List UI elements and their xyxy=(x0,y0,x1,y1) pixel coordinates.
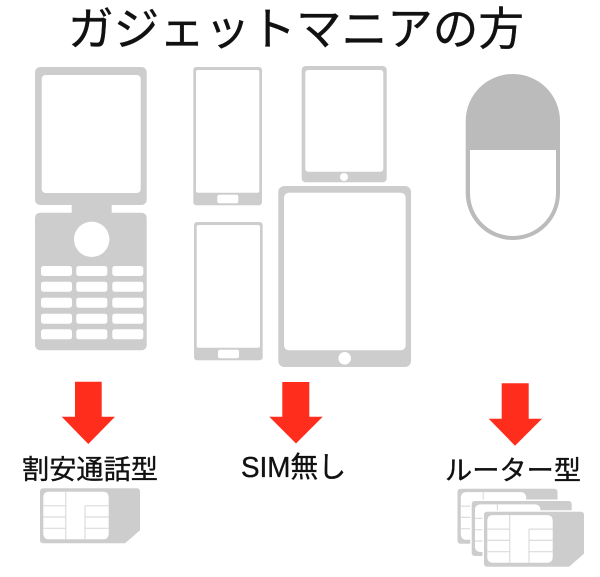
label: router type: ルーター型 xyxy=(445,456,581,486)
title: ガジェットマニアの方 xyxy=(68,4,524,55)
icon: smartphone bottom xyxy=(194,222,263,360)
arrow: right xyxy=(489,383,542,446)
icon: flip phone xyxy=(35,67,147,350)
arrow: left xyxy=(62,382,115,444)
icon: large tablet xyxy=(278,186,411,367)
label: no SIM: SIM無し xyxy=(241,451,346,484)
label: cheap call type: 割安通話型 xyxy=(22,455,158,485)
icon: SIM card xyxy=(40,488,140,543)
arrow: center xyxy=(269,382,323,444)
icon: smartphone top xyxy=(193,67,262,205)
icon: small tablet xyxy=(302,66,387,182)
icon: mobile router xyxy=(466,74,560,240)
icon: stacked SIM cards xyxy=(458,489,585,567)
